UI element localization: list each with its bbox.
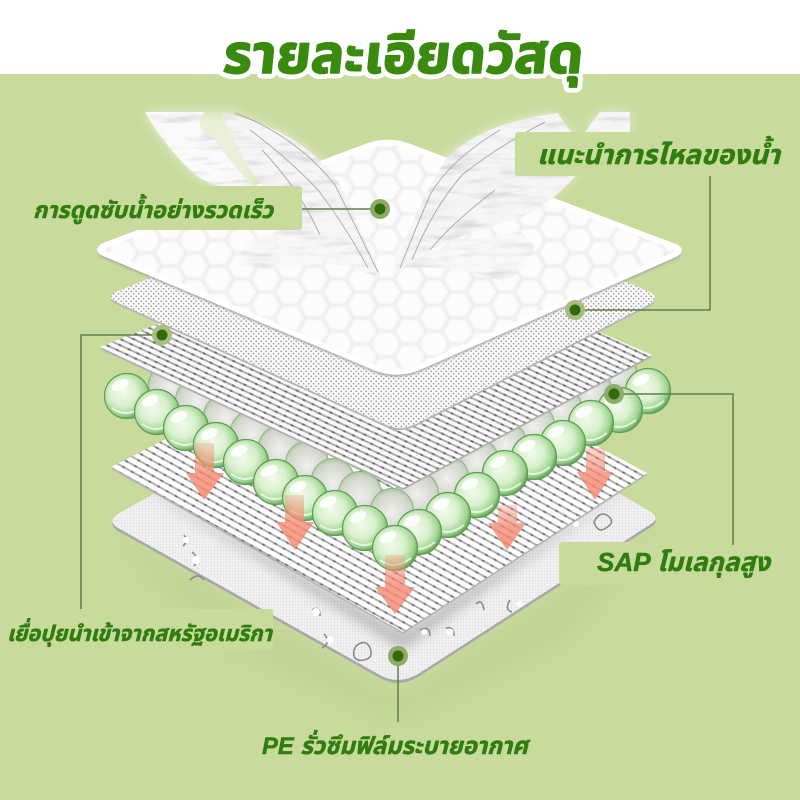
marker dots — [152, 199, 624, 666]
title: รายละเอียดวัสดุ — [220, 25, 587, 87]
layer 4: lower ADL net — [111, 330, 647, 634]
layer 1: white honeycomb top pad — [90, 130, 690, 380]
layer 5: PE breathable film — [112, 493, 656, 683]
leader lines — [81, 176, 733, 722]
water splash wings — [145, 112, 630, 282]
red downward flow arrows — [186, 443, 613, 614]
label: water flow guide: แนะนำการไหลของน้ำ — [537, 136, 781, 170]
back row of SAP beads — [148, 350, 636, 532]
soft glow behind the splash — [145, 112, 630, 277]
label: fast absorption: การดูดซับน้ำอย่างรวดเร็ว — [33, 194, 274, 225]
layer 2: dotted sheet — [111, 180, 655, 430]
label: high molecular SAP: SAP โมเลกุลสูง — [597, 547, 772, 578]
front row of SAP beads — [104, 368, 670, 570]
label: imported US fluff pulp: เยื่อปุยนำเข้าจากสหรัฐอเมริกา — [7, 618, 273, 647]
label panel backgrounds — [0, 132, 800, 651]
water marks on the film — [183, 514, 612, 660]
title: รายละเอียดวัสดุ — [220, 25, 587, 87]
label: PE breathable film: PE รั่วซึมฟิล์มระบายอากาศ — [262, 730, 531, 760]
layer 3: striped ADL sheet — [100, 235, 652, 490]
